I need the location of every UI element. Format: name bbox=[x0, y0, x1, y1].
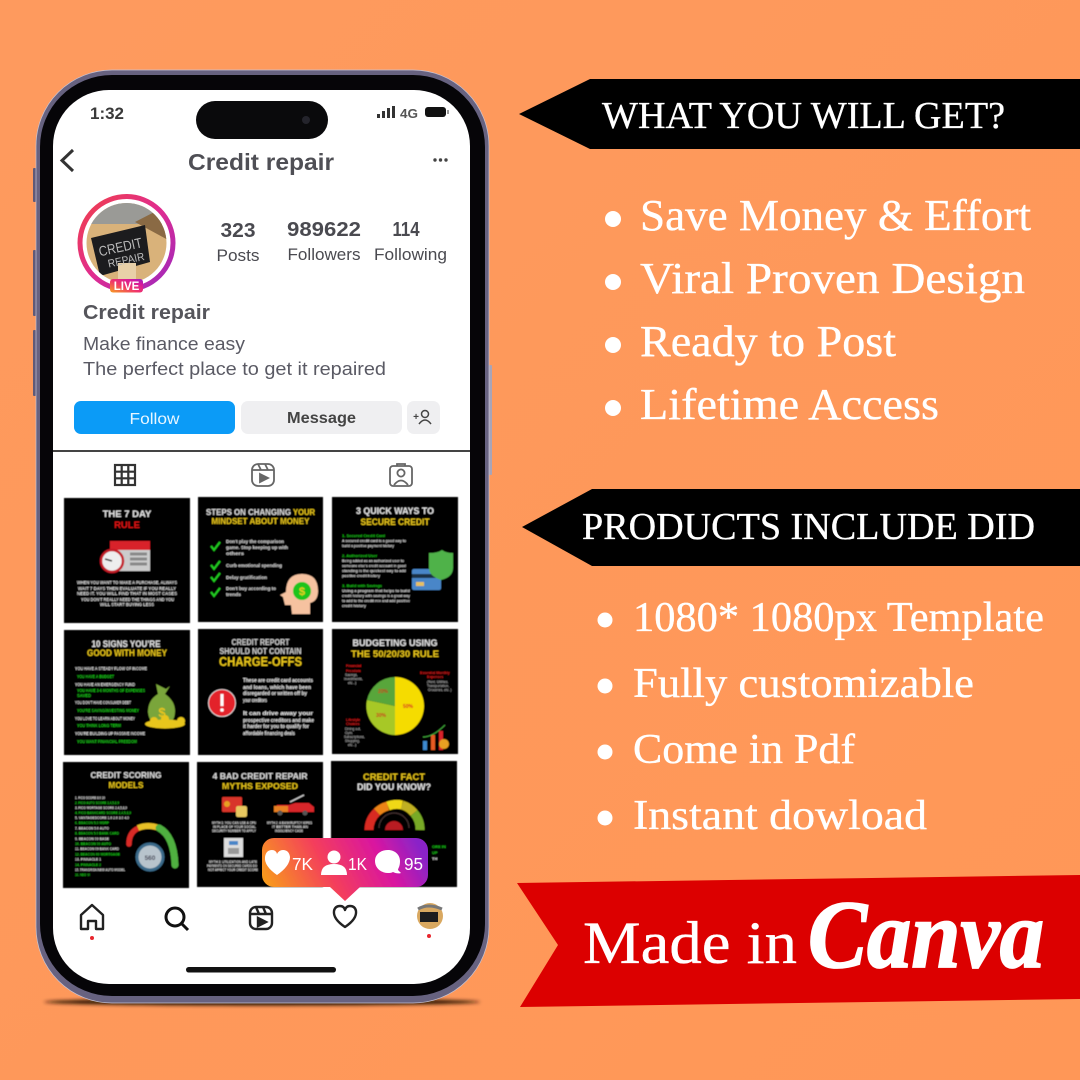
post: bad credit myths: SECURITY NUMBER TO APPLY bbox=[212, 829, 257, 833]
profile stats: 989622 bbox=[287, 219, 361, 241]
post: charge-offs: These are credit card accounts bbox=[243, 678, 313, 684]
nav icon: search bbox=[166, 908, 188, 930]
post: 10 signs: $ bbox=[158, 705, 166, 720]
post: 50/20/30 pie chart: Lifestyle bbox=[346, 718, 360, 722]
tab icon: tagged bbox=[390, 464, 412, 486]
post: 10 signs: YOU HAVE AN EMERGENCY FUND bbox=[75, 682, 135, 687]
post: 50/20/30 pie chart: Shopping, bbox=[345, 739, 360, 743]
message button: Message bbox=[287, 410, 356, 427]
profile bio: Credit repair bbox=[83, 301, 210, 324]
post: credit scoring models: 9. BEACON 09 BASE bbox=[75, 837, 110, 841]
post: 10 signs: 10 SIGNS YOU'RE bbox=[92, 639, 160, 649]
profile header bbox=[62, 149, 448, 175]
post: mindset steps: game. Stop keeping up with bbox=[226, 545, 288, 550]
post grid bbox=[63, 497, 458, 888]
post: charge-offs: CREDIT REPORT bbox=[232, 638, 290, 647]
avatar: CREDIT bbox=[97, 234, 144, 259]
post: credit fact gauge: DID YOU KNOW? bbox=[357, 782, 431, 792]
post: 7 day rule: WAIT 7 DAYS THEN EVALUATE IF YOU REALLY bbox=[78, 586, 176, 591]
home indicator bbox=[186, 967, 336, 972]
post: secure credit: credit history bbox=[342, 603, 367, 608]
profile stats: Following bbox=[374, 245, 447, 264]
post: 50/20/30 pie chart: Savings, bbox=[345, 673, 358, 677]
banner: made in canva bbox=[517, 875, 1080, 1007]
bottom navigation bbox=[81, 903, 443, 972]
post: credit scoring models: 11. BEACON 09 BANK CARD bbox=[75, 847, 119, 851]
post: 10 signs: SAVED bbox=[77, 693, 91, 698]
post: credit fact gauge bbox=[331, 761, 457, 887]
profile stats: 114 bbox=[392, 219, 420, 241]
post: bad credit myths: MYTH 1: YOU CAN USE A CPN bbox=[212, 821, 256, 825]
post: 7 day rule: NEED IT. YOU WILL FIND THAT IN MOST CASES bbox=[77, 591, 177, 596]
post: bad credit myths: PAYMENTS ON SECURED CARDS DO bbox=[207, 864, 257, 868]
post: charge-offs: disregarded or written off by bbox=[243, 691, 307, 697]
post: credit scoring models: 5. VANTAGESCORE 1.0 2.0 3.0 4.0 bbox=[75, 816, 129, 820]
post: credit scoring models: 3. FICO MORTAGE SCORE 2,4,5,8,9 bbox=[75, 806, 127, 810]
profile stats: Posts bbox=[216, 246, 260, 265]
post: secure credit: someone else's credit account in good bbox=[342, 563, 406, 568]
notification bubble: 95 bbox=[404, 854, 423, 874]
post: bad credit myths: NOT AFFECT YOUR CREDIT SCORE bbox=[208, 868, 259, 872]
notification bubble bbox=[262, 838, 428, 901]
post: mindset steps: trends bbox=[226, 592, 242, 597]
follow button bbox=[74, 401, 235, 434]
post: mindset steps: MINDSET ABOUT MONEY bbox=[212, 517, 310, 526]
post: credit scoring models: 13. PINNACLE 1 bbox=[75, 858, 101, 862]
post: charge-offs: affordable financing deals bbox=[243, 731, 295, 737]
post: 50/20/30 pie chart: Freedom bbox=[346, 669, 361, 673]
product features list: Instant dowload bbox=[633, 793, 927, 839]
post: credit scoring models: 14. PINNACLE 2 bbox=[75, 863, 101, 867]
post: charge-offs: CHARGE-OFFS bbox=[219, 655, 302, 669]
status bar: 1:32 bbox=[90, 104, 124, 123]
post: secure credit: Being added as an authorized user to bbox=[342, 558, 404, 563]
benefits list bbox=[605, 191, 1031, 429]
post: bad credit myths: INSOLVENCY CASE bbox=[275, 829, 304, 833]
post: mindset steps: Curb emotional spending bbox=[226, 563, 282, 568]
benefits list: Save Money & Effort bbox=[640, 191, 1031, 240]
post: bad credit myths: 4 BAD CREDIT REPAIR bbox=[212, 772, 308, 781]
nav icon: reels bbox=[250, 907, 272, 929]
post: secure credit: 1. Secured Credit Card bbox=[342, 533, 386, 538]
add friend button: + bbox=[413, 412, 419, 423]
post: 10 signs: GOOD WITH MONEY bbox=[87, 648, 167, 658]
post: bad credit myths: MYTH 3: UTILIZATION AND LATE bbox=[209, 860, 258, 864]
post: 50/20/30 pie chart: Gym, bbox=[345, 731, 353, 735]
post: 50/20/30 pie chart: etc...) bbox=[348, 743, 356, 747]
post: 10 signs: YOU DON'T HAVE CONSUMER DEBT bbox=[75, 700, 131, 705]
post: secure credit: A secured credit card is a good way to bbox=[342, 538, 406, 543]
post: 50/20/30 pie chart: Groceries, etc..) bbox=[428, 688, 451, 692]
post: bad credit myths: IN PLACE OF YOUR SOCIAL bbox=[213, 825, 256, 829]
icon: person bbox=[321, 850, 347, 875]
post: 50/20/30 pie chart: (Rent, Utilities, bbox=[427, 680, 449, 684]
post: 50/20/30 pie chart: Financial bbox=[346, 664, 361, 668]
post: secure credit: 2. Authorized User bbox=[342, 553, 378, 558]
post: secure credit: credit history with savings is a great way bbox=[342, 593, 411, 598]
post: credit fact gauge: UP bbox=[432, 850, 438, 855]
profile bio bbox=[83, 301, 386, 379]
post: mindset steps: STEPS ON CHANGING bbox=[206, 508, 291, 517]
avatar: LIVE bbox=[114, 281, 140, 293]
post: 50/20/30 pie chart: THE 50/20/30 RULE bbox=[351, 649, 439, 660]
profile bio: Make finance easy bbox=[83, 334, 245, 354]
post: 50/20/30 pie chart: 20% bbox=[378, 689, 389, 695]
post: bad credit myths: IT BETTER THAN AN bbox=[272, 825, 309, 829]
nav icon: heart bbox=[334, 906, 356, 927]
post: charge-offs: SHOULD NOT CONTAIN bbox=[220, 647, 302, 656]
banner: what you will get: WHAT YOU WILL GET? bbox=[602, 95, 1005, 137]
profile bio: The perfect place to get it repaired bbox=[83, 359, 386, 379]
nav icon: home bbox=[81, 905, 103, 929]
benefits list: Viral Proven Design bbox=[640, 254, 1025, 303]
message button bbox=[241, 401, 402, 434]
status bar: 4G bbox=[400, 106, 418, 121]
post: 7 day rule: RULE bbox=[114, 520, 140, 531]
phone frame bbox=[33, 70, 492, 1003]
benefits list: Ready to Post bbox=[640, 317, 896, 366]
tab icon: reels bbox=[252, 464, 274, 486]
post: credit scoring models: 15. TRANSRISK/NEW AUTO MODEL bbox=[75, 868, 126, 872]
post: 10 signs: YOU HAVE A BUDGET bbox=[77, 674, 114, 679]
profile stats: 323 bbox=[220, 220, 256, 242]
post: 10 signs: YOU WANT FINANCIAL FREEDOM bbox=[77, 739, 137, 744]
post: credit scoring models: 2. FICO AUTO SCORE 2,4,5,8,9 bbox=[75, 801, 119, 805]
post: mindset steps: YOUR bbox=[293, 508, 315, 517]
post: mindset steps: Delay gratification bbox=[226, 575, 267, 580]
post: charge-offs: It can drive away your bbox=[243, 711, 313, 717]
post: 10 signs: YOU THINK LONG TERM bbox=[77, 723, 121, 728]
post: credit scoring models: CREDIT SCORING bbox=[90, 771, 162, 780]
post: credit scoring models: 7. BEACON 5.0 AUTO bbox=[75, 826, 109, 830]
product features list: Come in Pdf bbox=[633, 727, 855, 773]
post: credit fact gauge: TH bbox=[432, 856, 437, 861]
post: mindset steps: Don't play the comparison bbox=[226, 539, 284, 544]
post: mindset steps: Don't buy according to bbox=[226, 586, 276, 591]
post: credit scoring models: MODELS bbox=[108, 781, 144, 790]
post: credit scoring models: 560 bbox=[145, 855, 156, 862]
post: 50/20/30 pie chart: Expenses bbox=[427, 675, 443, 679]
post: 7 day rule bbox=[64, 498, 190, 623]
banner: made in canva: Canva bbox=[808, 881, 1044, 988]
add friend button bbox=[407, 401, 440, 434]
notification bubble: 1K bbox=[348, 854, 367, 874]
product features list bbox=[598, 595, 1044, 839]
phone shadow bbox=[44, 998, 480, 1006]
post: charge-offs bbox=[198, 629, 323, 755]
post: mindset steps: others bbox=[226, 551, 245, 556]
post: 7 day rule: WHEN YOU WANT TO MAKE A PURCHASE, ALWAYS bbox=[77, 580, 177, 585]
post: 50/20/30 pie chart: BUDGETING USING bbox=[352, 638, 438, 648]
post: 10 signs bbox=[64, 630, 190, 755]
status bar bbox=[90, 101, 449, 139]
profile header: Credit repair bbox=[188, 149, 334, 175]
post: 50/20/30 pie chart: 50% bbox=[403, 704, 414, 710]
post: secure credit bbox=[332, 497, 458, 622]
post: 50/20/30 pie chart: Choices bbox=[346, 722, 360, 726]
product features list: 1080* 1080px Template bbox=[633, 595, 1044, 641]
banner: products include bbox=[522, 489, 1080, 566]
post: 10 signs: YOU LOVE TO LEARN ABOUT MONEY bbox=[75, 716, 135, 721]
post: 7 day rule: YOU DON'T REALLY NEED THE THINGS AND YOU bbox=[81, 597, 174, 602]
post: 50/20/30 pie chart: Subscriptions, bbox=[344, 735, 365, 739]
post: credit scoring models bbox=[63, 762, 189, 888]
post: secure credit: 3 QUICK WAYS TO bbox=[356, 506, 434, 516]
post: credit scoring models: 10. BEACON 09 AUTO bbox=[75, 842, 111, 846]
post: 10 signs: YOU'RE SAVING/INVESTING MONEY bbox=[77, 708, 139, 713]
banner: what you will get bbox=[519, 79, 1080, 149]
post: secure credit: positive credit history bbox=[342, 573, 381, 578]
post: 10 signs: YOU'RE BUILDING UP PASSIVE INCOME bbox=[75, 731, 145, 736]
post: 50/20/30 pie chart bbox=[332, 629, 458, 754]
post: credit scoring models: 4. FICO BANKCARD SCORE 2,4,5,8,9 bbox=[75, 811, 131, 815]
post: mindset steps bbox=[198, 497, 323, 622]
post: credit scoring models: 12. BEACON 09 MORTGAGE bbox=[75, 852, 121, 856]
banner: made in canva: Made in bbox=[583, 910, 797, 976]
product features list: Fully customizable bbox=[633, 661, 974, 707]
tab icon: grid bbox=[115, 465, 135, 485]
post: mindset steps: $ bbox=[299, 586, 305, 598]
icon: speech bubble bbox=[375, 850, 401, 873]
post: charge-offs: and loans, which have been bbox=[243, 685, 311, 691]
icon: heart bbox=[265, 850, 290, 875]
post: charge-offs: prospective creditors and make bbox=[243, 718, 314, 724]
avatar bbox=[80, 196, 173, 293]
post: credit fact gauge: ORE IN bbox=[432, 844, 446, 849]
post: credit scoring models: 1. FICO SCORE 8.0 10 bbox=[75, 796, 105, 800]
post: 50/20/30 pie chart: Transportation, bbox=[427, 684, 449, 688]
benefits list: Lifetime Access bbox=[640, 380, 939, 429]
post: secure credit: Using a program that helps to build bbox=[342, 588, 411, 593]
follow button: Follow bbox=[130, 411, 180, 428]
post: secure credit: 3. Build with Savings bbox=[342, 583, 383, 588]
nav icon: profile picture bbox=[417, 903, 443, 929]
post: 10 signs: YOU HAVE A STEADY FLOW OF INCOME bbox=[75, 666, 147, 671]
avatar: REPAIR bbox=[107, 251, 146, 270]
profile stats bbox=[216, 219, 447, 265]
banner: products include: PRODUCTS INCLUDE DID bbox=[582, 506, 1035, 548]
post: secure credit: SECURE CREDIT bbox=[360, 517, 430, 528]
post: bad credit myths: MYTH 2: A BANKRUPTCY WIPES bbox=[267, 821, 313, 825]
post: credit scoring models: 6. BEACON 5.0 MSRP bbox=[75, 821, 110, 825]
post: credit scoring models: 16. NEO VI bbox=[75, 873, 90, 877]
post: 50/20/30 pie chart: Investments, bbox=[344, 677, 363, 681]
post: credit fact gauge: CREDIT FACT bbox=[363, 772, 426, 782]
notification bubble: 7K bbox=[292, 854, 313, 874]
post: 50/20/30 pie chart: Essential Monthly bbox=[420, 671, 450, 675]
post: 7 day rule: WILL START BUYING LESS bbox=[100, 602, 154, 607]
phone screen bbox=[53, 90, 470, 984]
post: bad credit myths: MYTHS EXPOSED bbox=[222, 782, 298, 791]
post: bad credit myths bbox=[197, 762, 323, 887]
post: 50/20/30 pie chart: 30% bbox=[376, 713, 387, 719]
post: 50/20/30 pie chart: etc...) bbox=[348, 681, 356, 685]
post: charge-offs: your creditors bbox=[243, 698, 267, 704]
phone mockup bbox=[33, 70, 492, 1006]
post: 10 signs: YOU HAVE 3-6 MONTHS OF EXPENSES bbox=[77, 688, 145, 693]
post: 7 day rule: THE 7 DAY bbox=[103, 509, 152, 520]
post: credit scoring models: 8. BEACON 5.0 BANK CARD bbox=[75, 832, 119, 836]
post: secure credit: standing is the quickest way to add bbox=[342, 568, 407, 573]
post: secure credit: to add to the credit mix and add positive bbox=[342, 598, 411, 603]
profile stats: Followers bbox=[288, 245, 360, 264]
post: charge-offs: it harder for you to qualify for bbox=[243, 724, 309, 730]
post: secure credit: build a positive payment history bbox=[342, 543, 395, 548]
post: 50/20/30 pie chart: Dining out, bbox=[345, 727, 361, 731]
